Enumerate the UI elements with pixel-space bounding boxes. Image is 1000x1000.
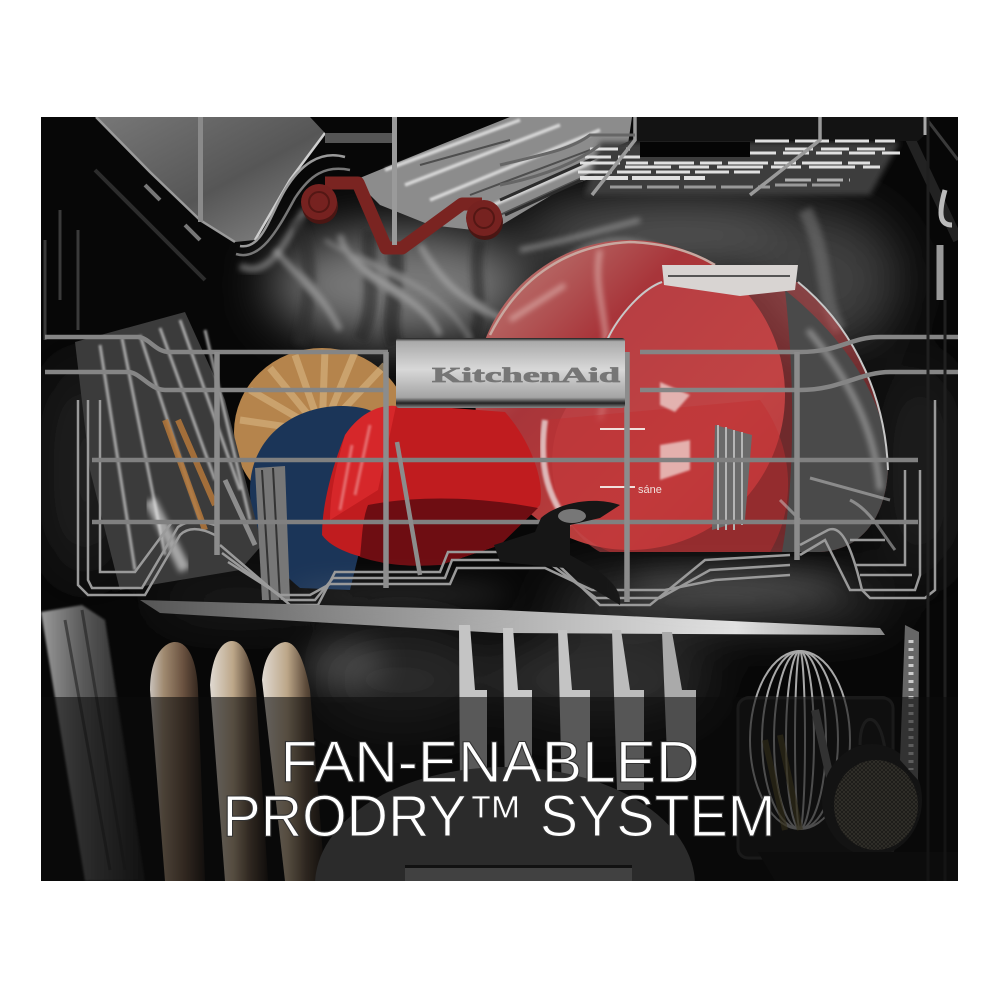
lower glass bowl (315, 767, 695, 881)
dark caption band (41, 697, 958, 881)
tan plate (234, 348, 396, 481)
caption: FAN-ENABLED (280, 730, 700, 795)
caption (222, 730, 776, 849)
background steam (45, 197, 956, 730)
upper rack: wire shelf (500, 117, 925, 195)
wispy steam (275, 210, 840, 345)
lower rack wires (45, 337, 958, 605)
brand name: KitchenAid (432, 363, 621, 387)
cutting boards (41, 605, 325, 881)
upper rack: glass dish (355, 117, 635, 232)
foreground steam (290, 569, 845, 690)
upper rack: baking pan (96, 117, 395, 269)
glass bowl (543, 265, 905, 552)
bottom handle (405, 865, 632, 881)
rack handle badge (396, 338, 625, 408)
blue plate (250, 406, 372, 590)
icon: red spray arm (301, 117, 503, 248)
plates in lower rack (459, 625, 696, 805)
red plate (475, 240, 785, 550)
side wall details (45, 117, 958, 340)
latch mechanism (494, 501, 620, 605)
red dish (322, 406, 541, 566)
lower rack tray (140, 600, 885, 635)
glass bowl: sáne (638, 484, 662, 496)
photo: dishwasher interior (41, 117, 958, 881)
rack rails (45, 337, 958, 602)
glass baking dishes left (75, 312, 290, 600)
caption: PRODRY™ SYSTEM (222, 784, 776, 849)
whisk and strainer (738, 117, 958, 881)
